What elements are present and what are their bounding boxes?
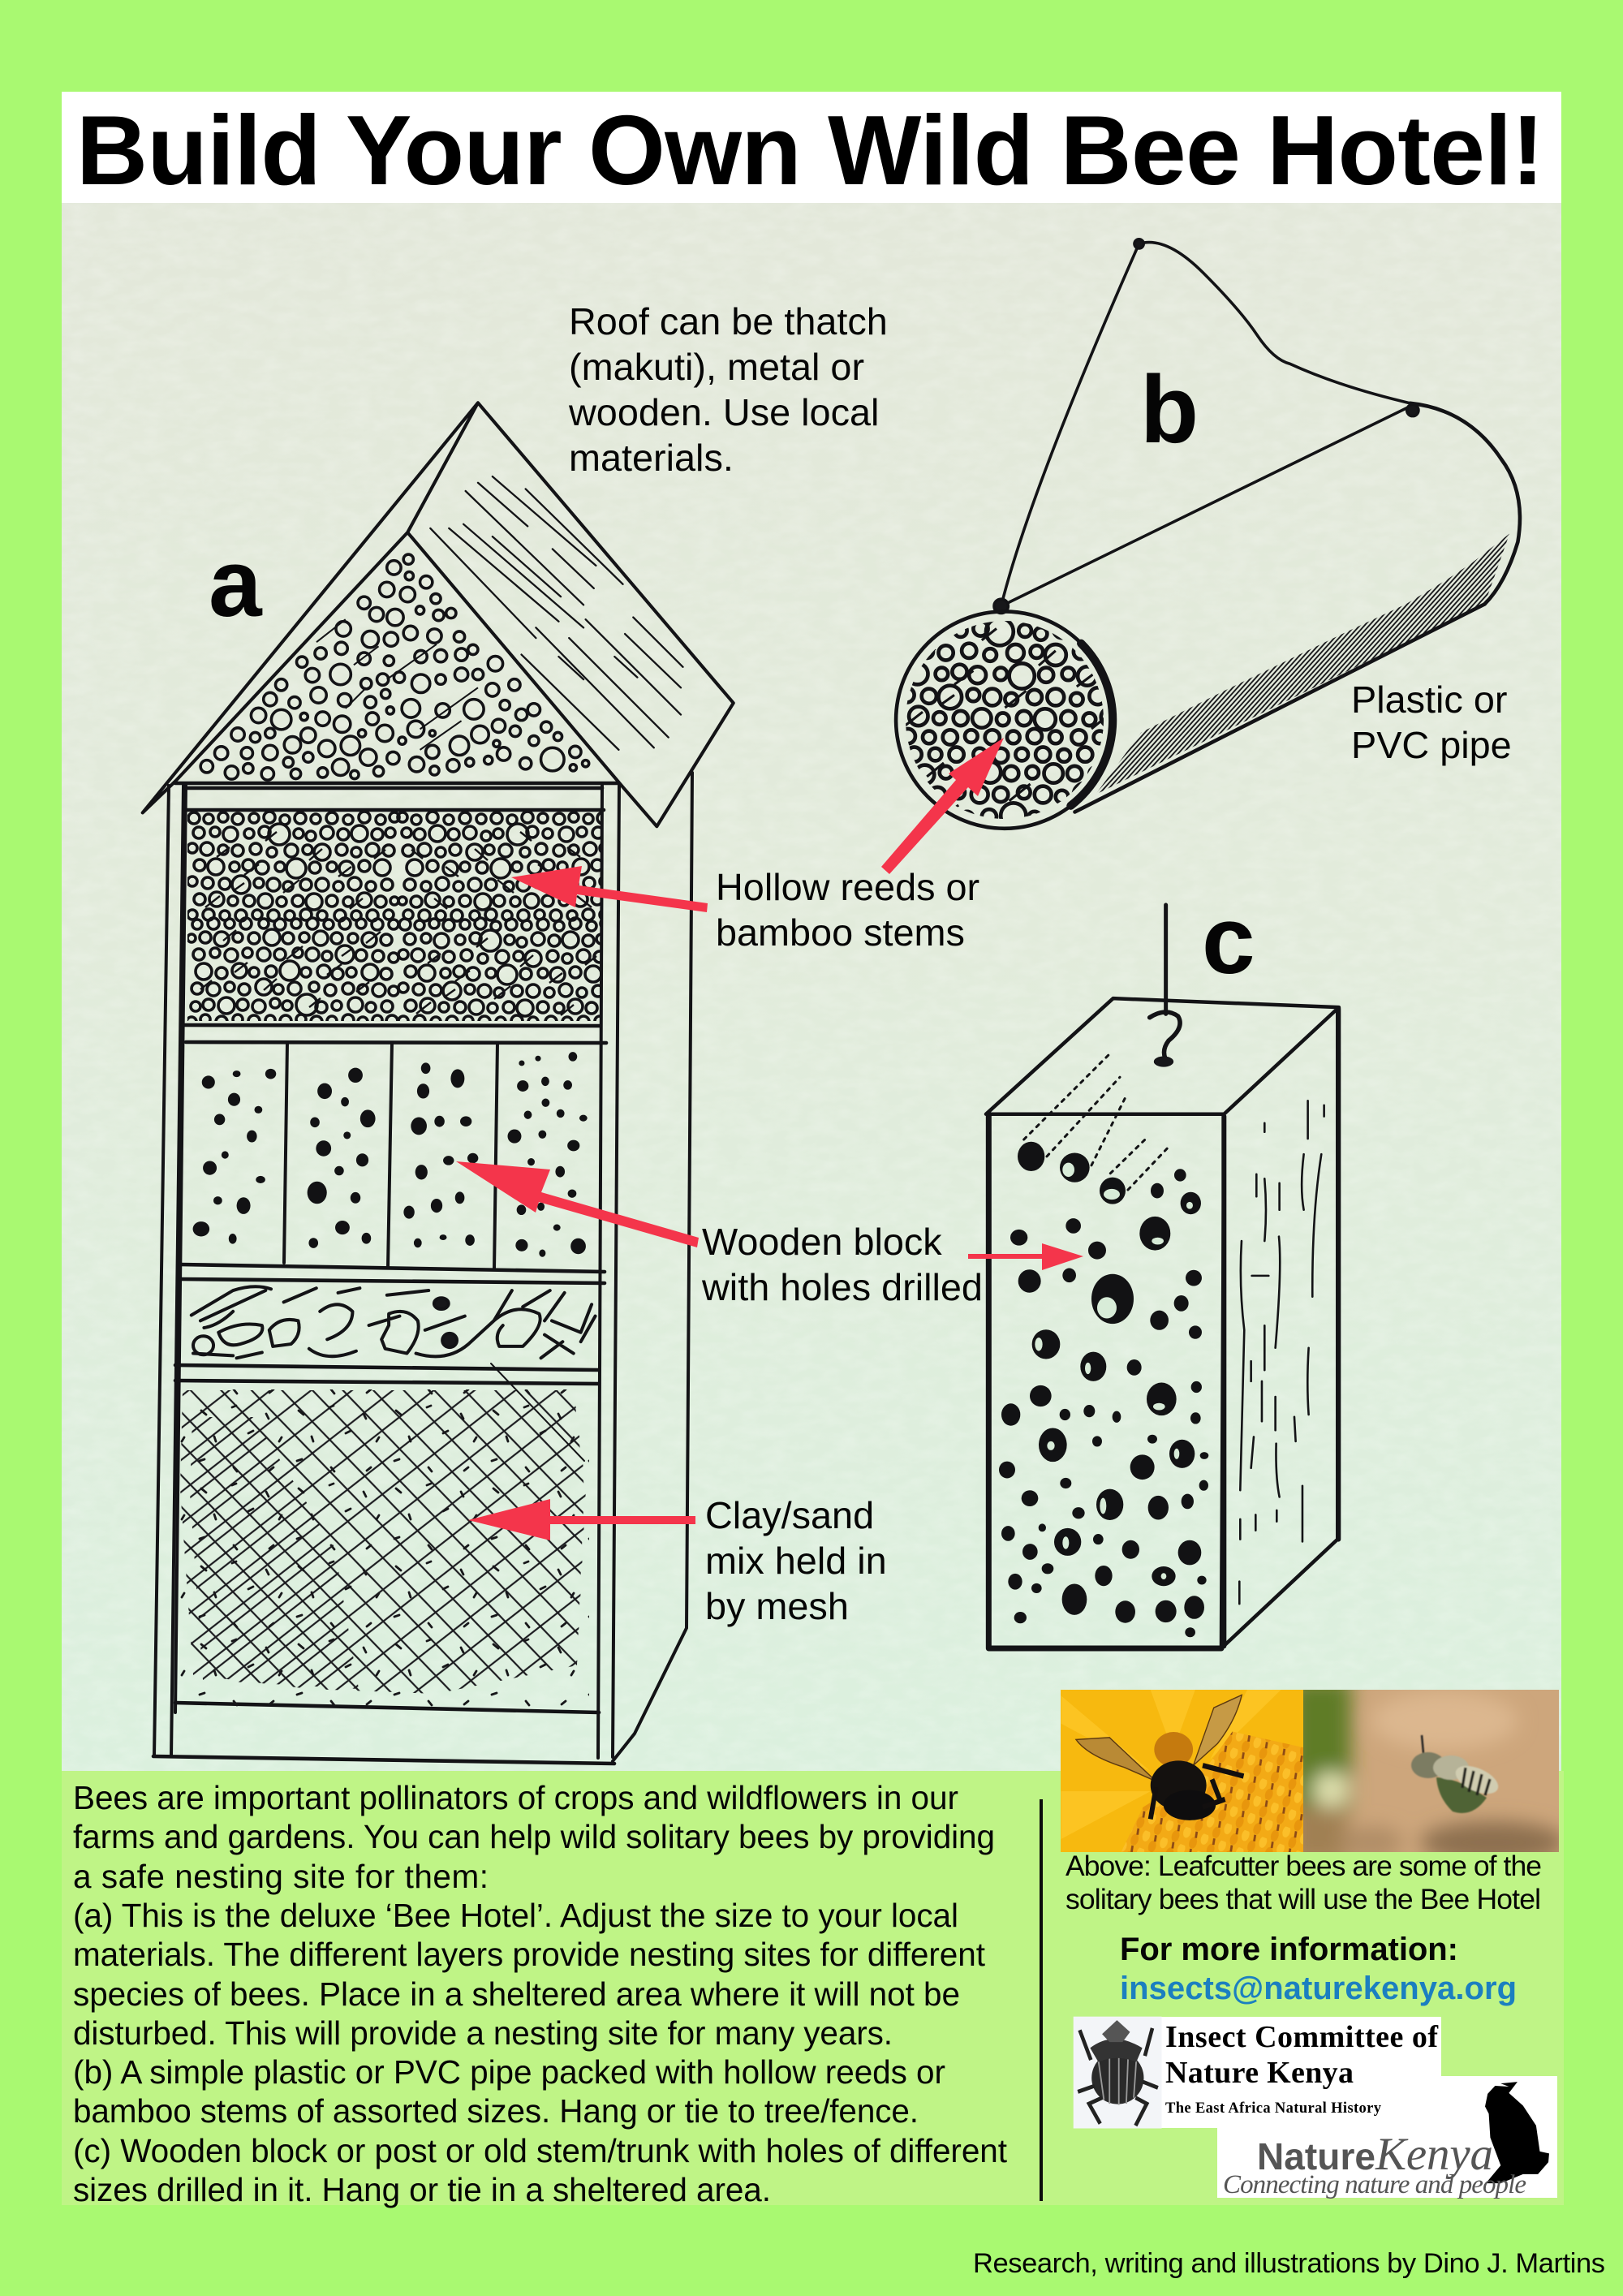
label: roof: (makuti), metal or xyxy=(569,346,864,388)
letter b: b xyxy=(1140,356,1199,463)
title: Build Your Own Wild Bee Hotel! xyxy=(76,95,1544,205)
logo: Nature Kenya: Kenya xyxy=(1375,2129,1493,2180)
instructions text: disturbed. This will provide a nesting site for many years. xyxy=(73,2014,893,2052)
contact information: For more information: xyxy=(1120,1932,1458,1967)
reed panel holes xyxy=(187,812,610,1027)
label: wooden block: with holes drilled xyxy=(701,1266,983,1308)
instructions text xyxy=(73,1779,1007,2208)
instructions text: bamboo stems of assorted sizes. Hang or tie to tree/fence. xyxy=(73,2092,919,2130)
logo: Nature Kenya: Nature xyxy=(1257,2135,1375,2178)
drilled holes xyxy=(999,1142,1208,1637)
photo: leafcutter bee on yellow flower xyxy=(1061,1690,1303,1853)
arrow: wooden block c xyxy=(968,1243,1083,1270)
label: wooden block: Wooden block xyxy=(702,1221,942,1263)
arrow: reeds in pipe xyxy=(881,738,1004,874)
label: pipe: Plastic or xyxy=(1351,678,1507,721)
instructions text: Bees are important pollinators of crops and wildflowers in our xyxy=(73,1779,958,1816)
label: roof: wooden. Use local xyxy=(568,391,879,433)
instructions text: (b) A simple plastic or PVC pipe packed with hollow reeds or xyxy=(73,2053,945,2091)
logo: Insect Committee of Nature Kenya: Insect Committee of xyxy=(1165,2020,1439,2054)
instructions text: (a) This is the deluxe ‘Bee Hotel’. Adjust the size to your local xyxy=(73,1897,958,1934)
pipe end reed holes xyxy=(906,621,1104,819)
label: wooden block xyxy=(701,1221,983,1308)
bee xyxy=(1076,1738,1156,1781)
photo caption xyxy=(1065,1850,1542,1915)
label: clay: by mesh xyxy=(705,1585,849,1627)
logo: Nature Kenya: Connecting nature and people xyxy=(1223,2170,1526,2199)
icon: beetle xyxy=(1074,2017,1162,2128)
label: roof: Roof can be thatch xyxy=(569,300,888,342)
divider line xyxy=(1040,1799,1043,2201)
hotel roof xyxy=(143,403,734,826)
logo: Nature Kenya xyxy=(1217,2076,1557,2199)
instructions text: farms and gardens. You can help wild solitary bees by providing xyxy=(73,1818,995,1855)
photo caption: solitary bees that will use the Bee Hotel xyxy=(1065,1883,1541,1915)
letter a: a xyxy=(209,530,263,637)
icon: bird silhouette xyxy=(1485,2082,1549,2183)
panel: paper illustration area xyxy=(62,203,1561,1771)
illustration b: PVC pipe hotel xyxy=(896,239,1520,829)
clay and sand behind wire mesh xyxy=(180,1363,589,1708)
label: pipe xyxy=(1351,678,1512,766)
panel: instructions xyxy=(62,1771,1564,2205)
label: reeds: bamboo stems xyxy=(716,911,965,954)
label: clay: Clay/sand xyxy=(705,1494,874,1536)
flying bee xyxy=(1411,1735,1502,1813)
instructions text: a safe nesting site for them: xyxy=(73,1858,489,1895)
contact information: insects@naturekenya.org xyxy=(1120,1971,1517,2006)
illustration c: wooden block hotel xyxy=(986,905,1339,1648)
instructions text: sizes drilled in it. Hang or tie in a sheltered area. xyxy=(73,2171,771,2208)
arrow: mesh xyxy=(468,1499,695,1540)
label: clay: mix held in xyxy=(705,1540,887,1582)
logo: Insect Committee of Nature Kenya xyxy=(1074,2017,1441,2128)
label: roof xyxy=(568,300,888,479)
photo: leafcutter bee in flight xyxy=(1303,1690,1559,1852)
arrow: reeds in hotel xyxy=(511,866,708,912)
label: pipe: PVC pipe xyxy=(1351,724,1512,766)
logo: Insect Committee of Nature Kenya: The East Africa Natural History xyxy=(1165,2100,1382,2117)
contact information xyxy=(1120,1932,1517,2006)
illustration a: deluxe bee hotel xyxy=(143,403,734,1764)
block outline xyxy=(986,905,1339,1648)
pipe shading hatch xyxy=(1096,534,1509,795)
logo: Insect Committee of Nature Kenya: Nature Kenya xyxy=(1165,2056,1354,2090)
instructions text: (c) Wooden block or post or old stem/trunk with holes of different xyxy=(73,2132,1007,2169)
sticks layer xyxy=(192,1286,596,1358)
instructions text: species of bees. Place in a sheltered area where it will not be xyxy=(73,1975,960,2013)
hole highlights xyxy=(1035,1163,1193,1579)
gable reed holes xyxy=(200,554,589,780)
label: roof: materials. xyxy=(569,437,734,479)
credit: Research, writing and illustrations by Dino J. Martins xyxy=(973,2248,1605,2279)
label: reeds: Hollow reeds or xyxy=(716,866,979,908)
photo caption: Above: Leafcutter bees are some of the xyxy=(1065,1850,1542,1882)
label: clay xyxy=(705,1494,887,1627)
instructions text: materials. The different layers provide nesting sites for different xyxy=(73,1936,985,1973)
label: reeds xyxy=(716,866,979,954)
letter c: c xyxy=(1202,887,1255,994)
arrow: wooden block in hotel xyxy=(456,1161,699,1247)
hotel frame posts and shelves xyxy=(153,773,692,1764)
wooden block holes xyxy=(193,1052,588,1257)
pipe outline and string xyxy=(896,239,1520,829)
